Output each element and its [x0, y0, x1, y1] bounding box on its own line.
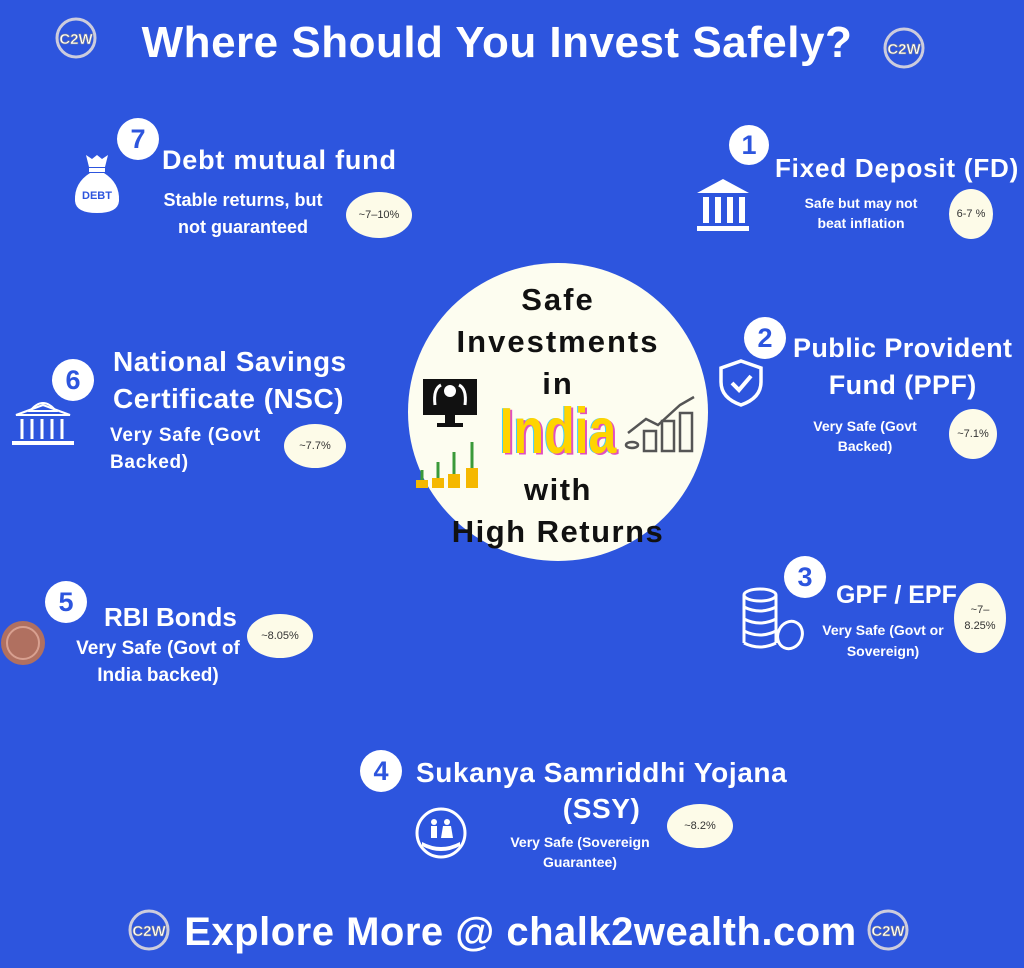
title: RBI Bonds [104, 602, 237, 632]
rate oval [949, 409, 997, 459]
icon: plants and coins [416, 442, 478, 488]
icon: building [12, 402, 74, 445]
description: Very Safe (Sovereign [510, 834, 650, 850]
rate oval [284, 424, 346, 468]
icon: growth coins [624, 396, 695, 452]
number 2: 2 [757, 323, 773, 353]
description: not guaranteed [178, 217, 308, 237]
title: Public Provident [793, 333, 1012, 363]
title: Fixed Deposit (FD) [775, 153, 1019, 183]
description: Backed) [838, 438, 892, 454]
rate oval: ~8.2% [684, 820, 716, 832]
item 3: GPF/EPF [742, 556, 1006, 659]
logo top right: C2W [887, 41, 922, 58]
number 4 [360, 750, 402, 792]
rate oval: ~7.1% [957, 428, 989, 440]
description [163, 190, 323, 237]
number 3: 3 [797, 562, 813, 592]
description [510, 834, 650, 870]
icon: monitor hands [423, 379, 477, 427]
number 6: 6 [65, 365, 81, 395]
description: Very Safe (Govt of [76, 638, 240, 659]
title: Debt mutual fund [162, 145, 397, 175]
item 5: RBI bonds [1, 581, 313, 686]
logo top left: C2W [59, 31, 94, 48]
description: Sovereign) [847, 643, 919, 659]
description: Very Safe (Govt or [822, 622, 944, 638]
title [793, 333, 1012, 400]
item 1: fixed deposit [697, 125, 1019, 239]
rate oval: ~7– [971, 604, 989, 616]
description: Backed) [110, 452, 189, 473]
item 6: NSC [12, 346, 347, 473]
center bottom text: with [524, 472, 592, 507]
number 1: 1 [741, 130, 757, 160]
center bottom text [452, 472, 664, 549]
rate oval [667, 804, 733, 848]
center heading: Investments [457, 324, 659, 359]
title: (SSY) [563, 793, 640, 824]
rate oval: ~7–10% [359, 209, 399, 221]
center heading: in [542, 366, 574, 401]
logo footer right: C2W [871, 923, 906, 940]
number 1 [729, 125, 769, 165]
description: Stable returns, but [163, 190, 323, 210]
item 2: PPF [719, 317, 1012, 459]
icon: family hand [416, 808, 466, 858]
rate oval [346, 192, 412, 238]
description [76, 638, 240, 686]
rate oval [954, 583, 1006, 653]
description [110, 425, 261, 473]
description: Guarantee) [543, 854, 617, 870]
description: Safe but may not [805, 195, 917, 211]
logo footer left [128, 910, 170, 950]
title: Where Should You Invest Safely? [142, 18, 852, 67]
number 2 [744, 317, 786, 359]
icon: shield [719, 359, 763, 407]
item 4: SSY [360, 750, 787, 870]
number 7 [117, 118, 159, 160]
icon: coin [1, 621, 45, 665]
rate oval: ~8.05% [261, 630, 299, 642]
center bottom text: High Returns [452, 514, 664, 549]
number 7: 7 [130, 124, 146, 154]
center heading [457, 282, 659, 401]
icon: debt bag [75, 155, 119, 213]
description: beat inflation [817, 215, 905, 231]
icon: bank [697, 179, 749, 231]
rate oval: 8.25% [964, 620, 996, 632]
description [813, 418, 917, 454]
title [113, 346, 347, 414]
rate oval [949, 189, 993, 239]
number 5 [45, 581, 87, 623]
description: India backed) [97, 665, 219, 686]
title: Certificate (NSC) [113, 383, 344, 414]
description [805, 195, 918, 231]
rate oval: 6-7 % [957, 208, 985, 220]
title: National Savings [113, 346, 347, 377]
title: Sukanya Samriddhi Yojana [416, 757, 787, 788]
number 4: 4 [373, 756, 389, 786]
description: Very Safe (Govt [110, 425, 261, 446]
description [822, 622, 944, 659]
India word: India [500, 395, 616, 467]
number 6 [52, 359, 94, 401]
center heading: Safe [521, 282, 595, 317]
number 5: 5 [58, 587, 74, 617]
icon: coin stack [742, 588, 804, 650]
title [416, 757, 787, 824]
logo footer left: C2W [132, 923, 167, 940]
title: Fund (PPF) [829, 370, 977, 400]
title: GPF / EPF [836, 581, 957, 609]
rate oval: ~7.7% [299, 440, 331, 452]
logo top right [884, 28, 924, 68]
item 7: debt mutual fund [75, 118, 412, 238]
logo footer right [868, 910, 908, 950]
icon: debt bag: DEBT [82, 190, 112, 202]
number 3 [784, 556, 826, 598]
footer text: Explore More @ chalk2wealth.com [184, 910, 857, 954]
center circle [408, 263, 708, 561]
description: Very Safe (Govt [813, 418, 917, 434]
logo top left [56, 18, 96, 58]
rate oval [247, 614, 313, 658]
